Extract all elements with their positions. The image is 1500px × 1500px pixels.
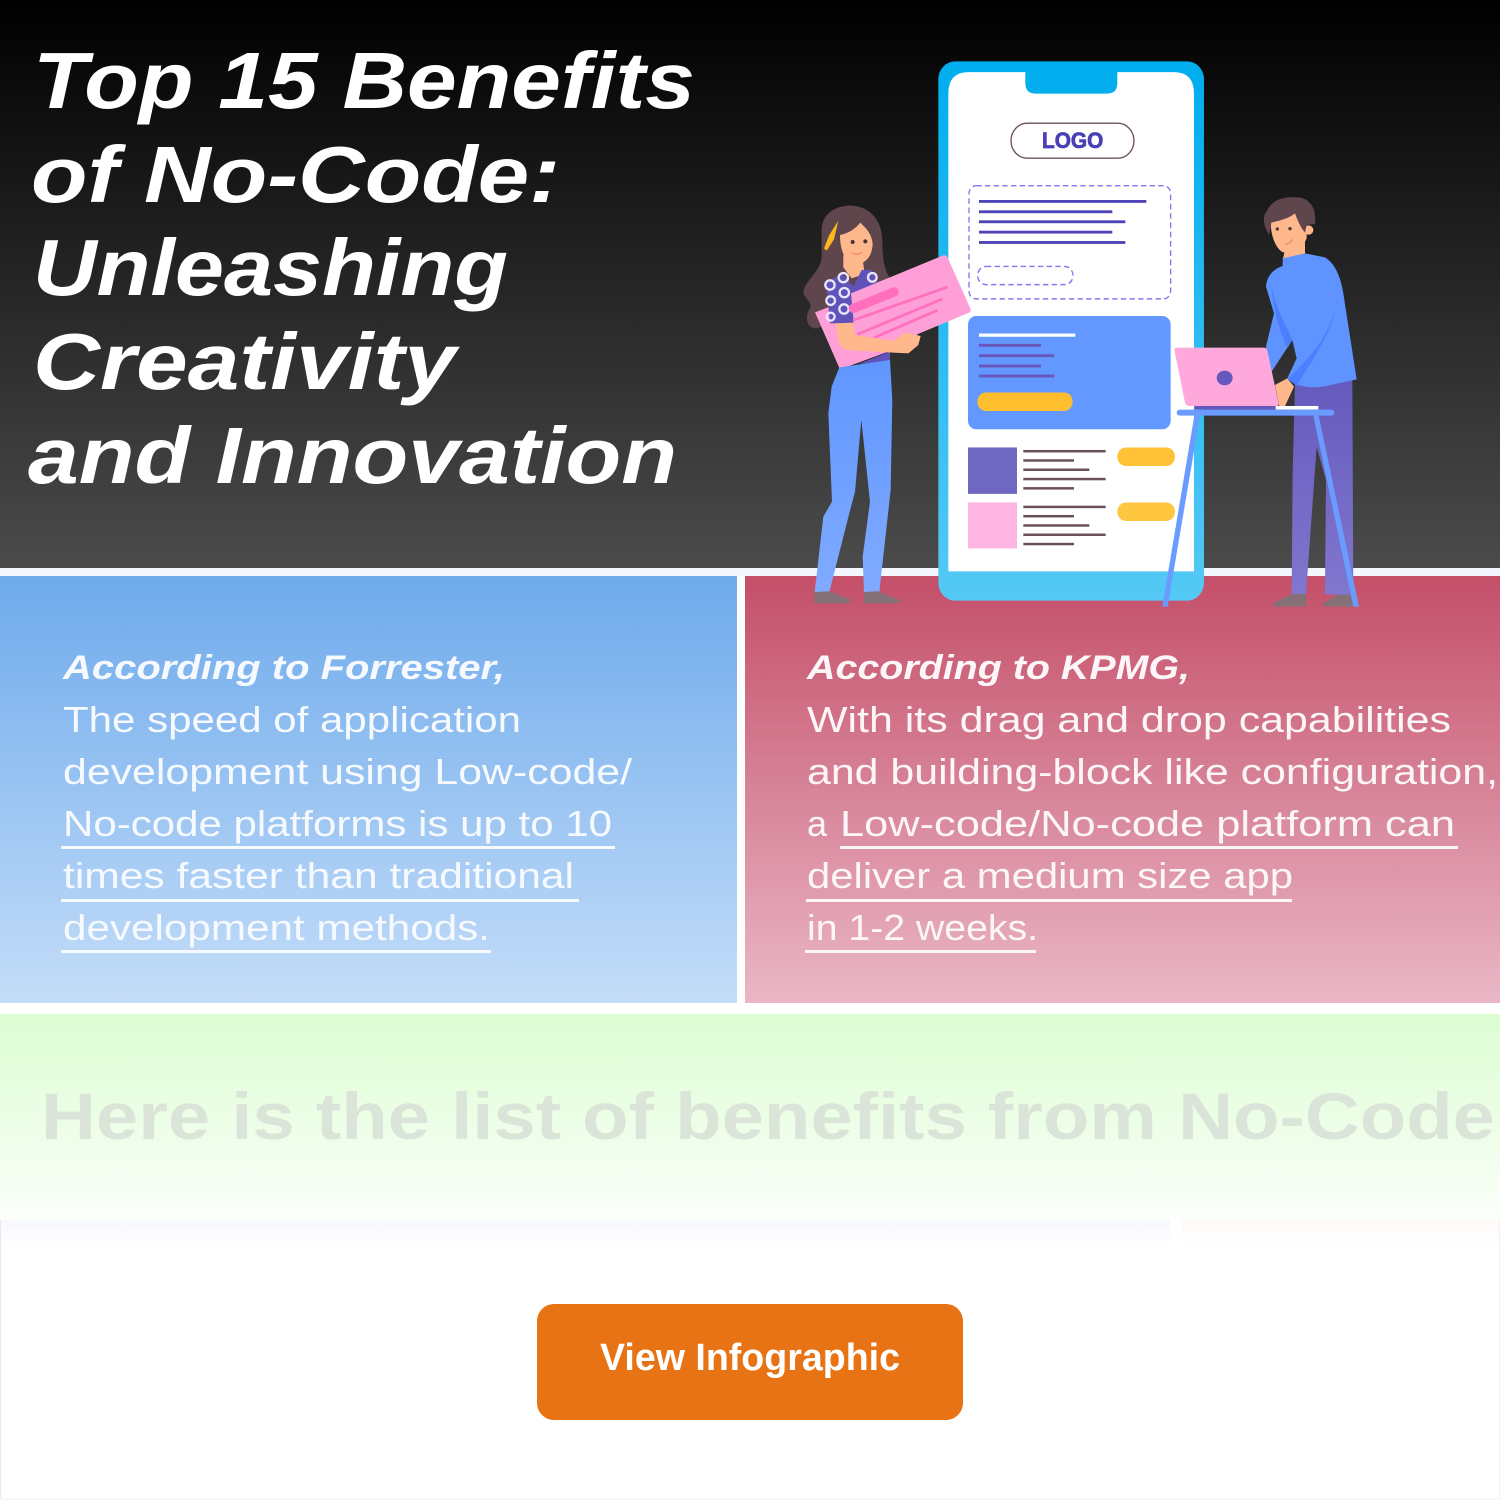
shoes: [1273, 594, 1353, 607]
illustration: man at laptop: [1162, 197, 1359, 607]
table: [1162, 410, 1359, 607]
button: View Infographic: View Infographic: [600, 1337, 900, 1379]
Forrester text: The speed of application: [63, 699, 521, 740]
KPMG text: a: [807, 803, 828, 844]
list row two: [968, 502, 1175, 549]
button: View Infographic: [537, 1304, 963, 1420]
neck and face: [843, 255, 864, 278]
title: Unleashing: [33, 223, 508, 312]
panel: list heading band: [0, 1014, 1500, 1220]
Forrester text: development methods.: [63, 907, 490, 948]
laptop: [1175, 348, 1318, 410]
Forrester text: [61, 649, 632, 953]
title: Creativity: [33, 317, 460, 406]
neck and head: [1283, 237, 1305, 260]
list row one: [968, 447, 1175, 494]
KPMG text: in 1-2 weeks.: [807, 907, 1038, 948]
panel: KPMG statistic: [745, 576, 1500, 1003]
Forrester text: development using Low-code/: [63, 751, 632, 792]
KPMG text: [805, 649, 1498, 953]
jeans: [815, 360, 892, 592]
Forrester text: According to Forrester,: [62, 649, 505, 687]
list heading: Here is the list of benefits from No-Code: [41, 1079, 1495, 1153]
title: of No-Code:: [31, 130, 560, 219]
panel: Forrester statistic: [0, 576, 737, 1003]
title: [28, 36, 695, 500]
hand: [1275, 378, 1294, 406]
hair pencil: [824, 221, 838, 251]
faded strips: [0, 1220, 1500, 1500]
logo pill: LOGO: [1042, 129, 1103, 153]
Forrester text: No-code platforms is up to 10: [63, 803, 612, 844]
KPMG text: According to KPMG,: [806, 649, 1190, 687]
title: Top 15 Benefits: [33, 36, 695, 125]
arm: [835, 323, 921, 353]
shirt: [826, 270, 890, 364]
shoes: [814, 591, 899, 603]
hero placeholder: [969, 186, 1171, 299]
KPMG text: deliver a medium size app: [807, 855, 1293, 896]
illustration: phone mockup: [938, 61, 1204, 601]
KPMG text: and building-block like configuration,: [807, 751, 1498, 792]
Forrester text: times faster than traditional: [63, 855, 574, 896]
sweater: [1266, 253, 1357, 387]
KPMG text: Low-code/No-code platform can: [840, 803, 1455, 844]
title: and Innovation: [28, 411, 677, 500]
blue content card: [968, 316, 1171, 429]
header background: [0, 0, 1500, 568]
front card: [851, 255, 971, 337]
trousers: [1292, 380, 1353, 595]
KPMG text: With its drag and drop capabilities: [807, 699, 1451, 740]
header divider: [0, 568, 1500, 576]
logo pill: [1011, 123, 1134, 158]
illustration: woman holding card: [803, 206, 971, 603]
hair: [803, 206, 890, 328]
back card: [815, 283, 920, 369]
